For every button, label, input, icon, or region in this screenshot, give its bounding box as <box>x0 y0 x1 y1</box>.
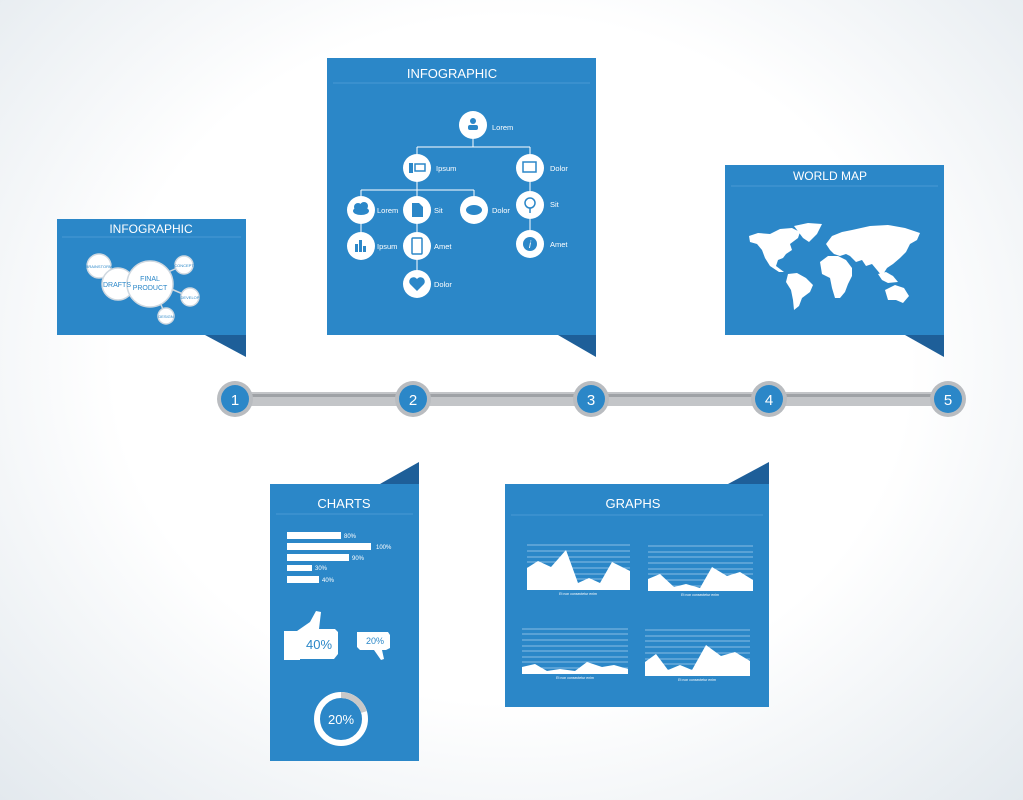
org chart nodes <box>347 111 544 298</box>
bar chart: 80% <box>344 534 357 540</box>
icon: thumbs up 40% <box>284 611 338 660</box>
heading: graphs: GRAPHS <box>606 496 661 511</box>
org chart labels: Dolor <box>492 206 510 215</box>
panel: charts <box>270 462 419 761</box>
org chart labels: Ipsum <box>436 164 456 173</box>
bar chart: 40% <box>322 578 335 584</box>
panel: world map <box>725 165 944 357</box>
org chart icons: i <box>529 240 532 251</box>
graph 1 <box>527 550 630 596</box>
org chart icons <box>353 118 537 291</box>
bar chart: 100% <box>376 545 392 551</box>
org chart labels: Lorem <box>492 123 513 132</box>
org chart labels: Ipsum <box>377 242 397 251</box>
org chart labels: Lorem <box>377 206 398 215</box>
panel: infographic small: DRAFTS <box>103 282 131 289</box>
org chart labels: Amet <box>434 242 452 251</box>
panel: infographic org chart <box>327 58 596 357</box>
graph 3: Et non consectetur enim <box>556 676 594 680</box>
graph 3 <box>522 662 628 680</box>
graph 2 <box>648 567 753 597</box>
step 1: 1 <box>231 392 239 409</box>
panel: infographic small: DEVELOP <box>181 295 200 300</box>
panel: infographic small: BRAINSTORM <box>86 264 112 269</box>
org chart labels: Sit <box>550 200 560 209</box>
bubble diagram <box>87 254 199 324</box>
icon: thumbs down 20%: 20% <box>366 636 384 646</box>
org chart labels: Amet <box>550 240 568 249</box>
timeline <box>217 381 966 417</box>
heading: infographic small: INFOGRAPHIC <box>109 222 193 236</box>
org chart labels: Dolor <box>550 164 568 173</box>
donut chart 20% <box>317 695 365 743</box>
org chart labels: Sit <box>434 206 444 215</box>
org chart labels <box>377 123 568 289</box>
panel: infographic small: FINAL <box>140 276 160 283</box>
org chart connectors <box>361 139 530 270</box>
graph 4 <box>645 645 750 682</box>
bar chart: 30% <box>315 566 328 572</box>
step 4 <box>751 381 787 417</box>
icon: thumbs up 40%: 40% <box>306 637 332 652</box>
heading: charts: CHARTS <box>317 496 371 511</box>
step 2 <box>395 381 431 417</box>
panel: infographic small: CONCEPT <box>174 263 194 268</box>
bar chart <box>287 532 392 584</box>
bar chart: 90% <box>352 556 365 562</box>
heading: world map: WORLD MAP <box>793 169 867 183</box>
org chart labels: Dolor <box>434 280 452 289</box>
donut chart 20%: 20% <box>328 712 354 727</box>
icon: thumbs down 20% <box>357 632 390 660</box>
step 5: 5 <box>944 392 952 409</box>
graph 4: Et non consectetur enim <box>678 678 716 682</box>
panel: graphs <box>505 462 769 707</box>
step 1 <box>217 381 253 417</box>
panel: infographic small <box>57 219 246 357</box>
graph 2: Et non consectetur enim <box>681 593 719 597</box>
step 3 <box>573 381 609 417</box>
step 3: 3 <box>587 392 595 409</box>
panel: infographic small: PRODUCT <box>133 285 168 292</box>
panel: infographic small: DESIGN <box>158 314 174 319</box>
step 4: 4 <box>765 392 773 409</box>
world map shapes <box>749 223 920 310</box>
heading: infographic: INFOGRAPHIC <box>407 66 497 81</box>
graph 1: Et non consectetur enim <box>559 592 597 596</box>
step 5 <box>930 381 966 417</box>
step 2: 2 <box>409 392 417 409</box>
